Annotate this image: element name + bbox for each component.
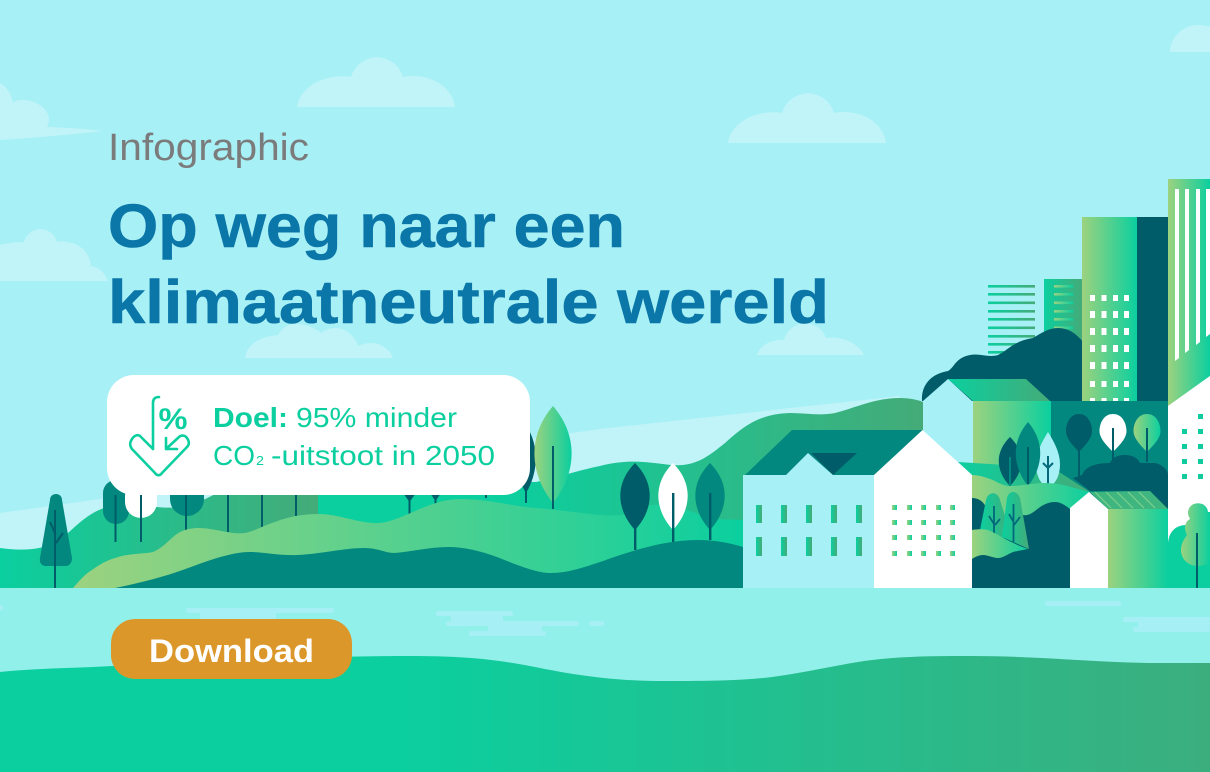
tree: gradient leaf <box>534 406 572 509</box>
tree: conifer left <box>40 494 72 588</box>
windows <box>892 505 955 556</box>
tree: green egg <box>1134 414 1160 462</box>
light sky band <box>0 396 923 590</box>
callout text: 95% minder <box>296 402 457 433</box>
title <box>108 192 829 336</box>
callout text: 2 <box>256 453 264 468</box>
clouds <box>0 25 1210 358</box>
building: striped outline <box>988 285 1035 354</box>
building: white right tower <box>1168 376 1210 588</box>
tree: white leaf <box>658 463 688 542</box>
back buildings <box>922 179 1210 406</box>
title line 1: Op weg naar een <box>108 192 625 260</box>
water ripples <box>0 601 1210 636</box>
trees on the middle hill <box>516 406 725 550</box>
house: light blue small <box>923 379 972 470</box>
tree: teal leaf <box>1016 422 1040 486</box>
label: Infographic: Infographic <box>108 127 309 169</box>
roof: green <box>948 379 1050 401</box>
tree: dark leaf <box>999 437 1021 486</box>
town <box>743 376 1210 588</box>
tree trunks <box>227 490 297 532</box>
house: small with striped roof <box>1070 491 1168 588</box>
tree: light leaf <box>1036 432 1060 486</box>
building: teal block <box>1051 401 1168 511</box>
windows <box>756 505 862 556</box>
back hill: left <box>0 470 318 590</box>
callout: goal <box>107 375 530 495</box>
download button: Download <box>149 633 314 669</box>
tree: dark egg <box>1066 414 1092 478</box>
trees on green block <box>999 422 1060 486</box>
callout text: Doel: <box>213 402 288 433</box>
trees on teal block <box>1066 414 1168 510</box>
building: tall striped tower <box>1168 179 1210 406</box>
conifer: right <box>1002 492 1029 549</box>
green slope <box>958 462 1090 510</box>
hill: small front <box>972 529 1028 559</box>
icon: percent down arrow: % <box>158 403 188 436</box>
callout text: CO <box>213 440 255 471</box>
tree: white egg <box>1100 414 1126 462</box>
callout text: -uitstoot in 2050 <box>271 440 495 471</box>
conifers <box>980 492 1029 549</box>
download button <box>111 619 352 679</box>
icon: percent down arrow <box>130 397 189 475</box>
house: white centre <box>874 430 972 588</box>
dark bushes <box>1073 455 1168 510</box>
tree: teal round right <box>170 470 204 532</box>
water <box>0 588 1210 772</box>
tree: teal leaf <box>695 463 725 540</box>
tree row behind the callout <box>103 470 297 542</box>
land foreground <box>0 656 1210 772</box>
front hill: light green <box>73 499 743 588</box>
sky background <box>0 0 1210 590</box>
small trees behind the front hill <box>403 490 487 516</box>
conifer: left <box>980 493 1012 538</box>
hill: light green on block <box>972 475 1090 530</box>
tree: white round <box>125 480 157 542</box>
building: back tower <box>1044 279 1082 359</box>
house: light blue with gable <box>743 430 922 588</box>
tree: dark leaf <box>620 463 650 550</box>
callout text <box>213 402 495 471</box>
title line 2: klimaatneutrale wereld <box>108 268 829 336</box>
building: green block behind <box>973 401 1051 491</box>
tree: teal round <box>103 480 129 542</box>
tree: bottom right <box>1168 503 1210 588</box>
back hill: centre and right <box>318 398 923 590</box>
building: central tower <box>1082 217 1168 401</box>
dark block <box>972 498 1070 588</box>
tree: dark leaf behind callout <box>516 425 536 503</box>
front hill: dark teal <box>115 540 743 588</box>
dark tree mass <box>922 328 1084 401</box>
